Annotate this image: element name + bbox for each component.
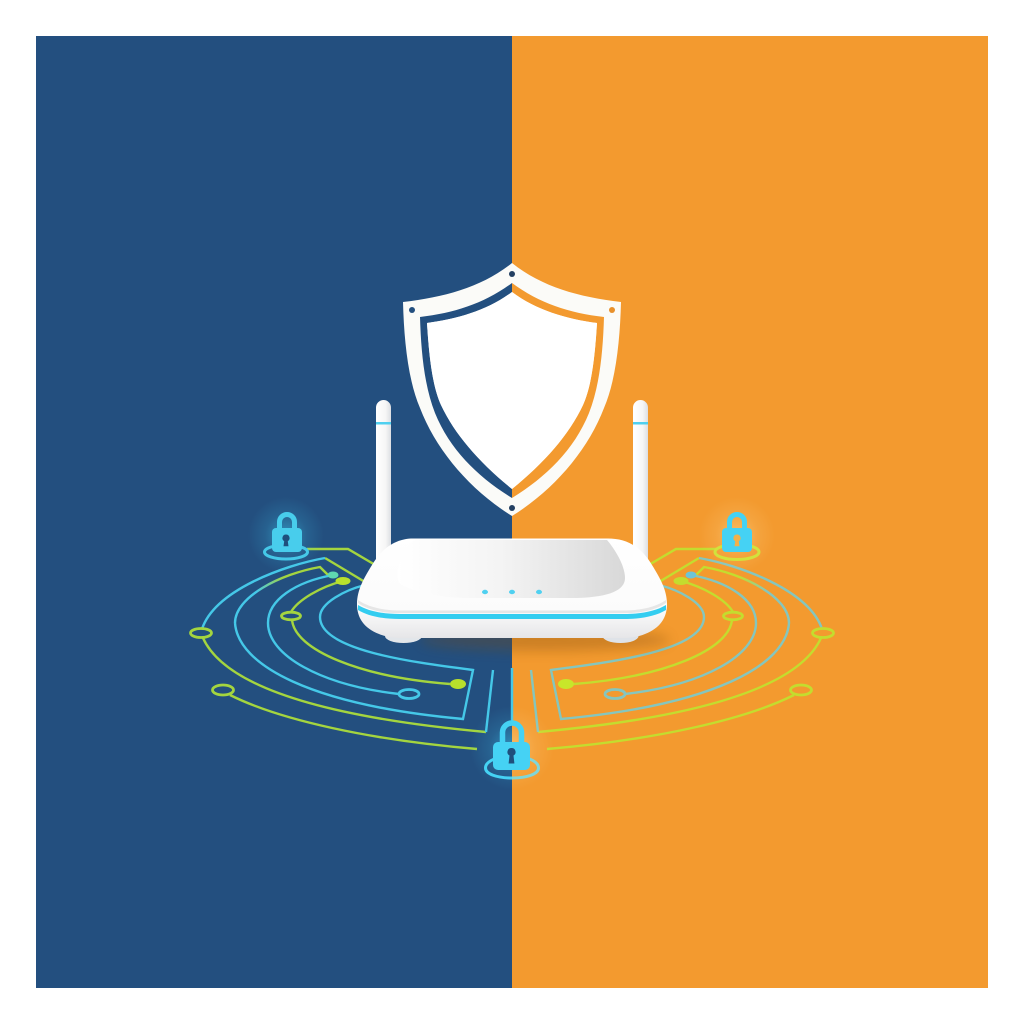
router cyan light strip bbox=[358, 605, 666, 619]
left circuit traces bbox=[190, 549, 512, 749]
node: outer ring bbox=[190, 628, 212, 638]
icon: right padlock bbox=[699, 497, 775, 573]
router body bbox=[357, 538, 667, 638]
shield white centre bbox=[427, 292, 597, 489]
shield orange inner band bbox=[512, 283, 604, 498]
router top panel bbox=[397, 540, 625, 598]
shield outer white plate bbox=[403, 263, 621, 516]
node: inner ring bbox=[282, 612, 300, 620]
router grey seam bbox=[358, 600, 666, 613]
node: lower ring bbox=[212, 685, 234, 695]
node: teal ring bbox=[605, 690, 625, 698]
node: inner ring bbox=[724, 612, 742, 620]
node: green dot bbox=[450, 679, 466, 689]
node: lower ring bbox=[790, 685, 812, 695]
icon: router shadow bbox=[420, 629, 670, 651]
node: outer ring bbox=[812, 628, 834, 638]
icon: left padlock bbox=[248, 497, 324, 573]
node: upper green dot bbox=[674, 577, 688, 585]
icon: router bbox=[357, 538, 667, 643]
router feet bbox=[385, 629, 638, 643]
node: blue dot bbox=[686, 572, 696, 578]
node: teal dot bbox=[328, 572, 338, 578]
right circuit traces bbox=[531, 549, 834, 749]
shield blue inner band bbox=[420, 283, 512, 498]
panel: blue left half bbox=[36, 36, 512, 988]
node: cyan ring bbox=[399, 690, 419, 698]
shield rivets bbox=[409, 271, 615, 511]
router status LEDs bbox=[482, 590, 542, 594]
icon: shield bbox=[403, 263, 621, 516]
panel: orange right half bbox=[512, 36, 988, 988]
icon: center padlock bbox=[476, 712, 544, 782]
node: upper green dot bbox=[336, 577, 350, 585]
icon: left antenna bbox=[376, 400, 391, 570]
node: green dot bbox=[558, 679, 574, 689]
icon: right antenna bbox=[633, 400, 648, 570]
